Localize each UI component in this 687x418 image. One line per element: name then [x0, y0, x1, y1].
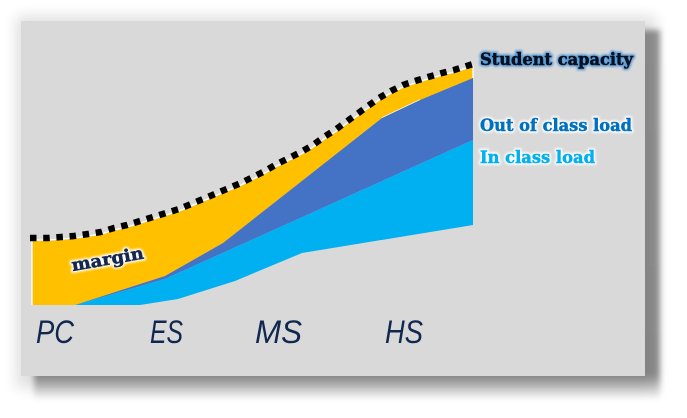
label: out of class load: Out of class load: [480, 116, 632, 136]
axis label: MS: MS: [255, 314, 302, 350]
area: in class load: [75, 140, 473, 305]
axis label: HS: HS: [385, 314, 423, 350]
axis label: ES: ES: [150, 314, 183, 350]
label: student capacity: Student capacity: [480, 50, 634, 70]
label: in class load: In class load: [480, 148, 595, 168]
area: out of class load: [75, 78, 473, 305]
area: margin: [32, 67, 473, 305]
line: student capacity: [30, 64, 473, 238]
label: out of class load: Out of class load: [480, 116, 632, 136]
label: margin: margin: [70, 244, 145, 276]
label: student capacity: Student capacity: [480, 50, 634, 70]
label: in class load: In class load: [480, 148, 595, 168]
panel: chart background: [21, 21, 645, 376]
label: margin: margin: [70, 244, 145, 276]
axis labels: [36, 314, 423, 350]
axis label: PC: PC: [36, 314, 75, 350]
white edges: [32, 66, 473, 305]
area chart: [30, 64, 473, 305]
